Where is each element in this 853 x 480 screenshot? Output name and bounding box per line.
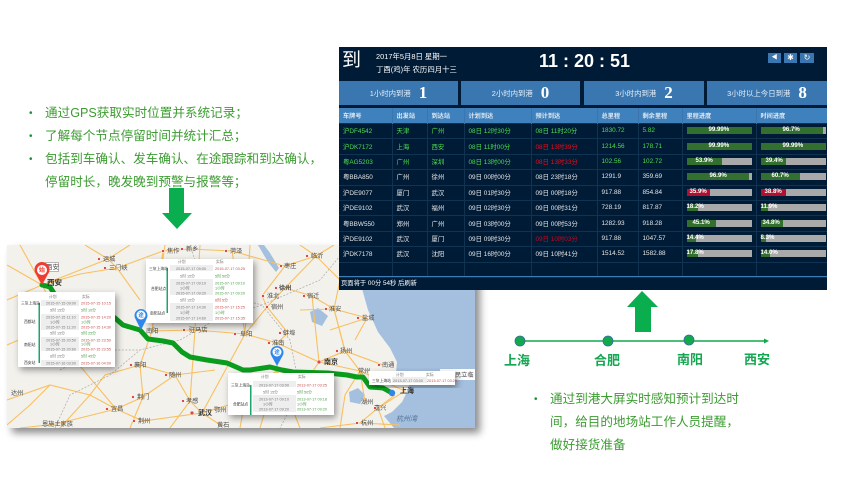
- table: arrivals: 郑州: [396, 221, 409, 228]
- city labels: 驻马店: [189, 326, 208, 334]
- popup: Hefei schedule: 1小时: [263, 402, 273, 406]
- table: arrivals: 粤AG5203: [343, 159, 373, 166]
- table: arrivals: 09日 00时53分: [536, 221, 578, 228]
- toolbar icons: ↻: [804, 53, 810, 62]
- popup: Xi'an schedule: 2015-07-15 20:60: [46, 348, 76, 352]
- table: arrivals: 34.8%: [762, 219, 780, 226]
- boundaries: [55, 245, 345, 428]
- summary tile: within 2 hours: 2小时内到港 0: [492, 83, 549, 102]
- toolbar icons: ✱: [787, 53, 794, 62]
- popup: Xi'an schedule: 实际: [82, 294, 90, 299]
- table: arrivals: 08日 12时30分: [468, 128, 511, 135]
- table: arrivals: 35.9%: [690, 188, 707, 195]
- popup: Shanghai schedule: [369, 371, 457, 385]
- table: arrivals: [339, 108, 827, 278]
- table: arrivals: 08日 23时18分: [536, 174, 578, 181]
- popup: Xi'an schedule: [18, 292, 115, 367]
- city labels: 荆州: [138, 417, 150, 425]
- map with route and popups: [6, 188, 770, 438]
- table: arrivals: 11.9%: [760, 203, 777, 210]
- table: arrivals: 39.4%: [766, 157, 783, 164]
- table: arrivals: 09日 10时03分: [536, 236, 578, 243]
- table: arrivals: 14.4%: [686, 234, 704, 241]
- popup: Xi'an schedule: 西都站: [24, 319, 36, 324]
- city labels: 西安: [46, 262, 60, 271]
- icon: blue pin Nanyang: 途: [138, 311, 144, 319]
- icon: blue pin Hefei: 途: [274, 348, 280, 356]
- popup: Hefei schedule: 5时 15分: [263, 390, 278, 394]
- city labels: 杭州湾: [396, 415, 418, 423]
- table: arrivals: 918.28: [642, 220, 662, 227]
- popup: Xi'an schedule: 1小时: [81, 342, 91, 346]
- popup: Nanyang schedule: [146, 259, 253, 323]
- timeline: Shanghai to Xi'an: 合肥: [594, 353, 620, 368]
- popup: Hefei schedule: 2013-07-17 03:00: [259, 384, 289, 388]
- summary tile: within 2 hours: [461, 81, 580, 105]
- popup: Hefei schedule: 合肥站点: [233, 402, 248, 406]
- popup: Nanyang schedule: 2015-07-17 09:20: [176, 292, 206, 296]
- table: arrivals: 14.0%: [760, 249, 778, 256]
- table: arrivals: 09日 00时31分: [536, 205, 578, 212]
- city labels: 南京: [324, 357, 338, 366]
- text block: arrival screen note: 通过到港大屏实时感知预计到达时: [550, 392, 739, 406]
- icon: blue current position dot: [389, 390, 395, 396]
- table: arrivals: 728.19: [602, 204, 621, 211]
- popup: Xi'an schedule: 2015-07-15 11:10: [46, 316, 76, 320]
- table: arrivals: 09日 00时00分: [468, 174, 511, 181]
- text block: GPS tracking bullets: 包括到车确认、发车确认、在途跟踪和到达确认，: [45, 152, 322, 166]
- popup: Xi'an schedule: 2015-07-15 14:20: [81, 316, 111, 320]
- table: arrivals: 102.56: [602, 158, 621, 165]
- text: •: [29, 154, 33, 165]
- text block: arrival screen note: [534, 392, 739, 452]
- text block: GPS tracking bullets: 通过GPS获取实时位置并系统记录；: [45, 106, 248, 120]
- city labels: 扬州: [340, 347, 352, 355]
- table: arrivals: 预计到达: [536, 113, 560, 120]
- popup: Nanyang schedule: 三灰上海站: [149, 266, 168, 271]
- popup: Nanyang schedule: 2015-07-17 14:60: [176, 316, 206, 320]
- popup: Xi'an schedule: 2015-07-15 23:50: [81, 338, 111, 342]
- city labels: 淮北: [267, 292, 280, 300]
- city labels: 蚌埠: [283, 329, 295, 337]
- strip label: [440, 369, 475, 380]
- footer: refresh countdown: 页面将于 00分 54秒 后刷新: [341, 280, 417, 287]
- table: arrivals: 武汉: [432, 190, 444, 197]
- table: arrivals: 09日 16时00分: [468, 251, 511, 258]
- popup: Xi'an schedule: 1小时: [50, 342, 60, 346]
- table: arrivals: 武汉: [396, 205, 409, 212]
- city labels: 常州: [358, 367, 370, 375]
- city labels: 临沂: [311, 252, 323, 260]
- popup: Xi'an schedule: 5时 25分: [81, 330, 96, 336]
- popup: Nanyang schedule: 1小时: [215, 286, 225, 290]
- city labels: 南阳: [146, 327, 158, 335]
- popup: Xi'an schedule: 2015-07-16 04:00: [81, 362, 111, 366]
- table: arrivals: 8.3%: [760, 234, 774, 241]
- city labels: 淮南: [272, 339, 284, 347]
- popup: Nanyang schedule: 1小时: [180, 286, 190, 290]
- popup: Xi'an schedule: 1小时: [50, 320, 60, 324]
- popup: Nanyang schedule: 5时 50分: [215, 274, 230, 278]
- popup: Nanyang schedule: 2015-07-17 15:25: [215, 306, 245, 310]
- table: arrivals: 817.87: [642, 204, 662, 211]
- popup: Xi'an schedule: 6时 25分: [50, 354, 65, 358]
- table: arrivals: 917.88: [602, 189, 621, 196]
- city labels: 焦作: [167, 247, 179, 255]
- city labels: 西安: [47, 277, 62, 287]
- popup: Nanyang schedule: 2015-07-17 14:30: [176, 306, 206, 310]
- table: arrivals: 到达站: [432, 113, 450, 120]
- city labels: 宜昌: [111, 405, 123, 413]
- popup: Xi'an schedule: 南阳站: [24, 342, 36, 347]
- table: arrivals: 17.8%: [686, 249, 704, 256]
- table: arrivals: 96.9%: [710, 172, 727, 179]
- heading: arrival character: 到: [342, 50, 361, 71]
- popup: Nanyang schedule: 6时 5分: [215, 298, 228, 302]
- table: arrivals: 里程进度: [686, 113, 711, 120]
- city labels: 襄阳: [134, 361, 146, 369]
- table: arrivals: 沪DE9102: [343, 205, 372, 212]
- summary tile: within 3 hours: 3小时内到港 2: [615, 83, 673, 102]
- popup: Nanyang schedule: 2015-07-17 09:20: [215, 292, 245, 296]
- table: arrivals: 1214.56: [602, 143, 625, 150]
- city labels: 徐州: [279, 284, 291, 292]
- table: arrivals: 粤BBW550: [343, 221, 375, 228]
- table: arrivals: 99.99%: [708, 142, 729, 149]
- table: arrivals: 厦门: [396, 190, 409, 197]
- toolbar icons: [768, 53, 814, 63]
- table: arrivals: 18.2%: [686, 203, 704, 210]
- summary tile: over 3 hours today: [707, 81, 827, 105]
- map base: [7, 245, 475, 428]
- summary tile: over 3 hours today: 3小时以上今日到港 8: [727, 83, 807, 102]
- popup: Xi'an schedule: 三灰上海站: [21, 300, 40, 306]
- popup: Shanghai schedule: 计划: [396, 372, 404, 377]
- table: arrivals: 沪DE9077: [343, 190, 372, 197]
- city labels: 阜阳: [240, 330, 252, 338]
- table: arrivals: 厦门: [432, 236, 444, 243]
- city labels: 随州: [169, 371, 181, 379]
- table: arrivals: 广州: [396, 174, 409, 181]
- popup: Hefei schedule: 1小时: [297, 402, 307, 406]
- table: arrivals: 45.1%: [692, 219, 710, 226]
- city dots: [98, 248, 380, 424]
- popup: Nanyang schedule: 1小时: [215, 310, 225, 315]
- popup: Shanghai schedule: 三灰上海站: [372, 378, 391, 383]
- popup: Xi'an schedule: 5时 45分: [81, 354, 96, 358]
- city labels: 菏泽: [230, 247, 242, 255]
- table: arrivals: 徐州: [432, 174, 444, 181]
- city labels: 嘉兴: [374, 404, 386, 412]
- popup: Xi'an schedule: 2015-07-15 10:15: [81, 302, 111, 306]
- date text: [376, 52, 457, 74]
- table: arrivals: 917.88: [602, 235, 621, 242]
- popup: Nanyang schedule: 南阳站点: [150, 310, 165, 316]
- lakes: [258, 245, 365, 404]
- popup: Nanyang schedule: 2015-07-17 09:10: [176, 282, 206, 286]
- timeline: Shanghai to Xi'an: 上海: [504, 353, 530, 368]
- popup: Xi'an schedule: 西安站: [24, 360, 36, 365]
- city labels: [11, 245, 418, 429]
- table: arrivals: 粤BBA850: [343, 174, 373, 181]
- text block: arrival screen note: 做好接货准备: [550, 438, 626, 452]
- table: arrivals: 时间进度: [760, 113, 785, 120]
- popup: Shanghai schedule: 2013-07-17 03:00: [393, 379, 423, 383]
- city labels: 运城: [103, 255, 115, 263]
- summary tile: within 3 hours: [584, 81, 704, 105]
- popup: Xi'an schedule: 1小时: [81, 320, 91, 324]
- table: arrivals: 1582.88: [642, 250, 666, 257]
- toolbar icons: ◀: [771, 55, 778, 61]
- table: arrivals: 1282.93: [602, 220, 625, 227]
- dashboard: arrivals screen: [339, 47, 827, 290]
- city labels: 杭州: [361, 419, 373, 427]
- popup: Nanyang schedule: 计划: [178, 259, 186, 264]
- text block: GPS tracking bullets: 了解每个节点停留时间并统计汇总；: [45, 129, 246, 143]
- popup: Hefei schedule: 2013-07-17 09:18: [297, 398, 327, 402]
- table: arrivals: 车牌号: [343, 113, 362, 120]
- table: arrivals: 99.99%: [782, 142, 803, 149]
- popup: Hefei schedule: 实际: [298, 374, 306, 379]
- table: arrivals: 854.84: [642, 189, 662, 196]
- table: arrivals: 09日 02时30分: [468, 205, 511, 212]
- popup: Nanyang schedule: 实际: [216, 259, 224, 264]
- city labels: 新乡: [186, 245, 198, 253]
- table: arrivals: 上海: [396, 144, 409, 151]
- table: arrivals: 出发站: [396, 113, 415, 120]
- city labels: 淮安: [329, 305, 341, 313]
- table: arrivals: 09日 03时00分: [468, 221, 511, 228]
- icon: red start pin: 始: [39, 266, 45, 274]
- timeline: Shanghai to Xi'an: [504, 335, 770, 368]
- table: arrivals: 武汉: [396, 251, 409, 258]
- timeline: Shanghai to Xi'an: 南阳: [677, 352, 703, 367]
- sea: [362, 290, 475, 428]
- popup: Nanyang schedule: 2015-07-17 09:10: [215, 282, 245, 286]
- text block: GPS tracking bullets: 停留时长，晚发晚到预警与报警等；: [45, 175, 246, 189]
- text: •: [29, 131, 33, 142]
- city labels: 盐城: [362, 314, 374, 322]
- table: arrivals: 广州: [432, 128, 444, 135]
- city labels: 枣庄: [284, 262, 296, 270]
- text: •: [29, 108, 33, 119]
- date text: 2017年5月8日 星期一: [376, 52, 447, 60]
- popup: Shanghai schedule: 2013-07-17 03:25: [427, 379, 457, 383]
- table: arrivals: 剩余里程: [642, 113, 667, 120]
- clock: 11 : 20 : 51: [539, 50, 630, 70]
- table: arrivals: 102.72: [642, 158, 662, 165]
- city labels: 达州: [11, 389, 23, 397]
- table: arrivals: 计划到达: [468, 113, 493, 120]
- table: arrivals: 1514.52: [602, 250, 625, 257]
- table: arrivals: 总里程: [602, 113, 620, 120]
- icon: blue pin Nanyang: [134, 309, 148, 330]
- popup: Xi'an schedule: 计划: [49, 294, 57, 299]
- table: arrivals: 08日 11时00分: [468, 144, 510, 151]
- footer: refresh countdown: [339, 276, 827, 291]
- table: arrivals: 09日 10时41分: [536, 251, 578, 258]
- table: arrivals: 天津: [396, 128, 409, 135]
- text: •: [534, 394, 538, 405]
- table: arrivals: 广州: [396, 159, 409, 166]
- table: arrivals: 08日 13时33分: [536, 159, 578, 166]
- table: arrivals: 沪DK7172: [343, 144, 372, 151]
- popup: Nanyang schedule: 2015-07-17 09:00: [176, 267, 206, 271]
- table: arrivals: 1047.57: [642, 235, 666, 242]
- summary tile: within 1 hour: [339, 81, 458, 105]
- table: arrivals: 08日 13时39分: [536, 144, 578, 151]
- table: arrivals: 38.8%: [764, 188, 782, 195]
- city labels: 宿迁: [307, 292, 319, 300]
- table: arrivals: 沪DK7178: [343, 251, 372, 258]
- route: [42, 285, 392, 393]
- table: arrivals: 178.71: [642, 143, 662, 150]
- roads: [7, 245, 405, 428]
- city labels: 上海: [400, 386, 414, 395]
- icon: blue pin Hefei: [270, 346, 284, 366]
- city labels: 恩施土家族: [42, 420, 73, 428]
- city labels: 武汉: [198, 408, 212, 417]
- popup: Hefei schedule: 三灰上海站: [231, 382, 250, 388]
- city labels: 孝感: [186, 397, 198, 405]
- text block: arrival screen note: 间，给目的地场站工作人员提醒，: [550, 415, 739, 429]
- popup: Xi'an schedule: 2015-07-15 14:30: [81, 326, 111, 330]
- table: arrivals: 08日 13时00分: [468, 159, 511, 166]
- popup: Nanyang schedule: 1小时: [180, 310, 190, 315]
- popup: Xi'an schedule: 2015-07-15 20:50: [46, 338, 76, 342]
- arrow: down to map: [162, 188, 192, 229]
- icon: red start pin: [35, 262, 50, 285]
- city labels: 鄂州: [214, 406, 226, 414]
- table: arrivals: 武汉: [396, 236, 409, 243]
- arrow: up to dashboard: [627, 291, 658, 332]
- text block: GPS tracking bullets: [29, 106, 322, 189]
- table: arrivals: 1291.9: [602, 173, 621, 180]
- table: arrivals: 60.7%: [772, 172, 789, 179]
- popup: Xi'an schedule: 2015-07-15 09:00: [46, 302, 76, 306]
- popup: Xi'an schedule: 2015-07-15 23:55: [81, 348, 111, 352]
- popup: Hefei schedule: 2013-07-17 09:10: [259, 398, 289, 402]
- city labels: 三门峡: [109, 264, 128, 272]
- popup: Nanyang schedule: 2015-07-17 03:25: [215, 267, 245, 271]
- table: arrivals: 沪DF4542: [343, 128, 372, 135]
- date text: 丁酉(鸡)年 农历四月十三: [376, 65, 457, 74]
- table: arrivals: 1830.72: [602, 127, 625, 134]
- popup: Hefei schedule: 计划: [261, 374, 269, 379]
- city labels: 荆门: [137, 393, 149, 401]
- popup: Xi'an schedule: 5时 15分: [50, 330, 65, 336]
- table: arrivals: 深圳: [432, 159, 444, 166]
- table: arrivals: 09日 01时30分: [468, 190, 511, 197]
- table: arrivals: 沈阳: [432, 251, 444, 258]
- city labels: 湖州: [361, 398, 373, 406]
- popup: Xi'an schedule: 2015-07-15 11:20: [46, 326, 76, 330]
- popup: Hefei schedule: 2013-07-17 03:25: [297, 384, 327, 388]
- table: arrivals: 西安: [432, 144, 444, 151]
- table: arrivals: 08日 11时20分: [536, 128, 577, 135]
- city labels: 南通: [382, 361, 394, 369]
- table: arrivals: 99.99%: [708, 126, 729, 133]
- table: arrivals: 广州: [432, 221, 444, 228]
- popup: Xi'an schedule: 5时 15分: [50, 308, 65, 312]
- table: arrivals: 沪DE9102: [343, 236, 372, 243]
- city labels: 宿州: [271, 303, 283, 311]
- table: arrivals: 53.9%: [696, 157, 713, 164]
- table: arrivals: 359.69: [642, 173, 662, 180]
- popup: Nanyang schedule: 2015-07-17 15:35: [215, 316, 245, 320]
- table: arrivals: 09日 00时18分: [536, 190, 578, 197]
- popup: Nanyang schedule: 合肥站点: [151, 286, 166, 291]
- table: arrivals: 09日 09时30分: [468, 236, 511, 243]
- popup: Hefei schedule: 2013-07-17 09:20: [297, 408, 327, 412]
- popup: Nanyang schedule: 5时 15分: [180, 298, 195, 302]
- city labels: 黄石: [217, 421, 229, 429]
- popup: Hefei schedule: 2013-07-17 09:20: [259, 408, 289, 412]
- popup: Hefei schedule: [228, 373, 334, 415]
- popup: Shanghai schedule: 实际: [426, 372, 434, 377]
- table: arrivals: 96.7%: [782, 126, 800, 133]
- table: arrivals: 福州: [432, 205, 444, 212]
- popup: Hefei schedule: 5时 50分: [297, 390, 312, 394]
- popup: Nanyang schedule: 5时 15分: [180, 274, 195, 278]
- timeline: Shanghai to Xi'an: 西安: [744, 352, 770, 367]
- map with route and popups: 民立临: [455, 371, 474, 379]
- table: arrivals: 5.82: [642, 127, 655, 134]
- summary tile: within 1 hour: 1小时内到港 1: [370, 83, 427, 102]
- popup: Xi'an schedule: 5时 10分: [81, 308, 96, 312]
- popup: Xi'an schedule: 2015-07-16 03:00: [46, 362, 76, 366]
